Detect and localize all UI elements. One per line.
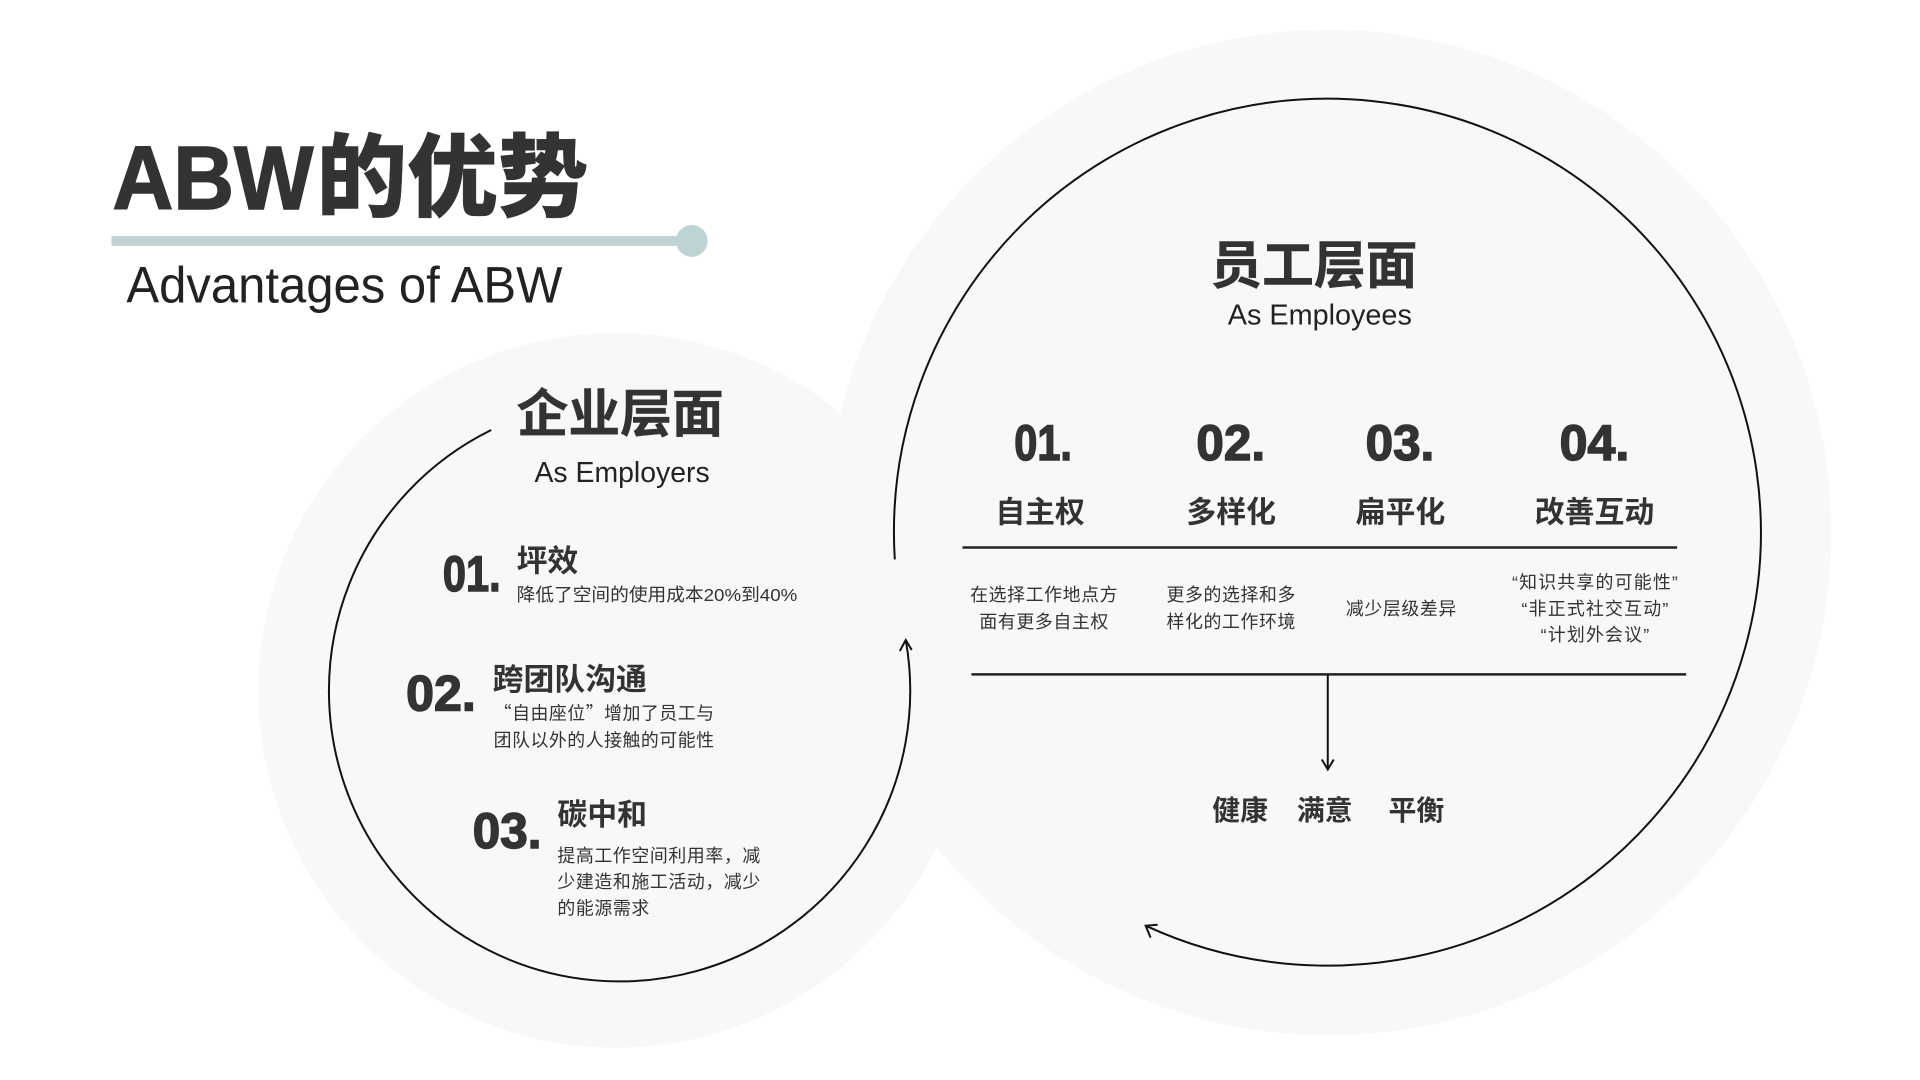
column 03: flat hierarchy: 减少层级差异 bbox=[1346, 599, 1457, 619]
column 04: better interaction bbox=[1512, 415, 1679, 645]
column 04: better interaction: “计划外会议” bbox=[1541, 625, 1650, 645]
column 02: diversity: 02. bbox=[1196, 415, 1265, 471]
item 02: cross-team communication: 02. bbox=[406, 666, 476, 722]
column 01: autonomy: 01. bbox=[1014, 415, 1072, 471]
column 04: better interaction: “非正式社交互动” bbox=[1522, 599, 1670, 619]
item 03: carbon neutrality: 提高工作空间利用率，减 bbox=[557, 842, 761, 868]
title: ABW bbox=[112, 128, 314, 228]
column 03: flat hierarchy bbox=[1346, 415, 1457, 619]
item 01: floor efficiency bbox=[443, 543, 797, 605]
panel: employers bbox=[329, 385, 912, 981]
outcomes: 平衡 bbox=[1388, 795, 1444, 826]
item 02: cross-team communication bbox=[406, 662, 715, 751]
column 03: flat hierarchy: 03. bbox=[1366, 415, 1434, 471]
divider lines bbox=[962, 547, 1686, 674]
column 01: autonomy: 在选择工作地点方 bbox=[970, 585, 1118, 605]
column 02: diversity: 多样化 bbox=[1186, 497, 1276, 530]
column 02: diversity: 样化的工作环境 bbox=[1166, 612, 1296, 632]
title: 的优势 bbox=[317, 128, 588, 229]
column 01: autonomy: 面有更多自主权 bbox=[979, 612, 1109, 632]
arrow: employers circular arc bbox=[329, 430, 912, 981]
item 03: carbon neutrality: 03. bbox=[473, 803, 541, 859]
item 02: cross-team communication: 团队以外的人接触的可能性 bbox=[494, 731, 715, 751]
heading: employers: 企业层面 bbox=[517, 385, 724, 443]
subtitle: Advantages of ABW bbox=[126, 257, 562, 314]
column 04: better interaction: “知识共享的可能性” bbox=[1512, 572, 1679, 592]
outcomes: 满意 bbox=[1297, 795, 1353, 826]
column 02: diversity: 更多的选择和多 bbox=[1166, 585, 1296, 605]
item 01: floor efficiency: 降低了空间的使用成本20%到40% bbox=[517, 585, 797, 605]
title bbox=[112, 128, 588, 229]
panel background: employees disc bbox=[826, 30, 1831, 1035]
item 03: carbon neutrality bbox=[473, 799, 761, 919]
arrow: employees circular arc bbox=[894, 99, 1761, 966]
arrow: down to outcomes bbox=[1322, 675, 1334, 769]
item 02: cross-team communication: “自由座位”增加了员工与 bbox=[494, 700, 715, 726]
subheading: employees: As Employees bbox=[1228, 300, 1412, 332]
outcomes bbox=[1212, 795, 1444, 826]
item 01: floor efficiency: 坪效 bbox=[517, 543, 578, 578]
panel background: employers disc bbox=[258, 333, 973, 1048]
item 03: carbon neutrality: 的能源需求 bbox=[557, 899, 650, 919]
column 03: flat hierarchy: 扁平化 bbox=[1356, 497, 1445, 530]
item 01: floor efficiency: 01. bbox=[443, 546, 501, 602]
column 02: diversity bbox=[1166, 415, 1296, 632]
heading: employees: 员工层面 bbox=[1210, 237, 1417, 295]
item 02: cross-team communication: 跨团队沟通 bbox=[493, 662, 647, 697]
subheading: employers: As Employers bbox=[534, 457, 710, 489]
item 03: carbon neutrality: 碳中和 bbox=[557, 799, 647, 832]
column 04: better interaction: 改善互动 bbox=[1535, 497, 1654, 530]
outcomes: 健康 bbox=[1212, 795, 1268, 826]
column 04: better interaction: 04. bbox=[1560, 415, 1629, 471]
panel: employees bbox=[894, 99, 1761, 966]
item 03: carbon neutrality: 少建造和施工活动，减少 bbox=[557, 868, 761, 894]
column 01: autonomy bbox=[970, 415, 1118, 632]
column 01: autonomy: 自主权 bbox=[995, 497, 1085, 530]
title underline with dot bbox=[111, 225, 708, 257]
